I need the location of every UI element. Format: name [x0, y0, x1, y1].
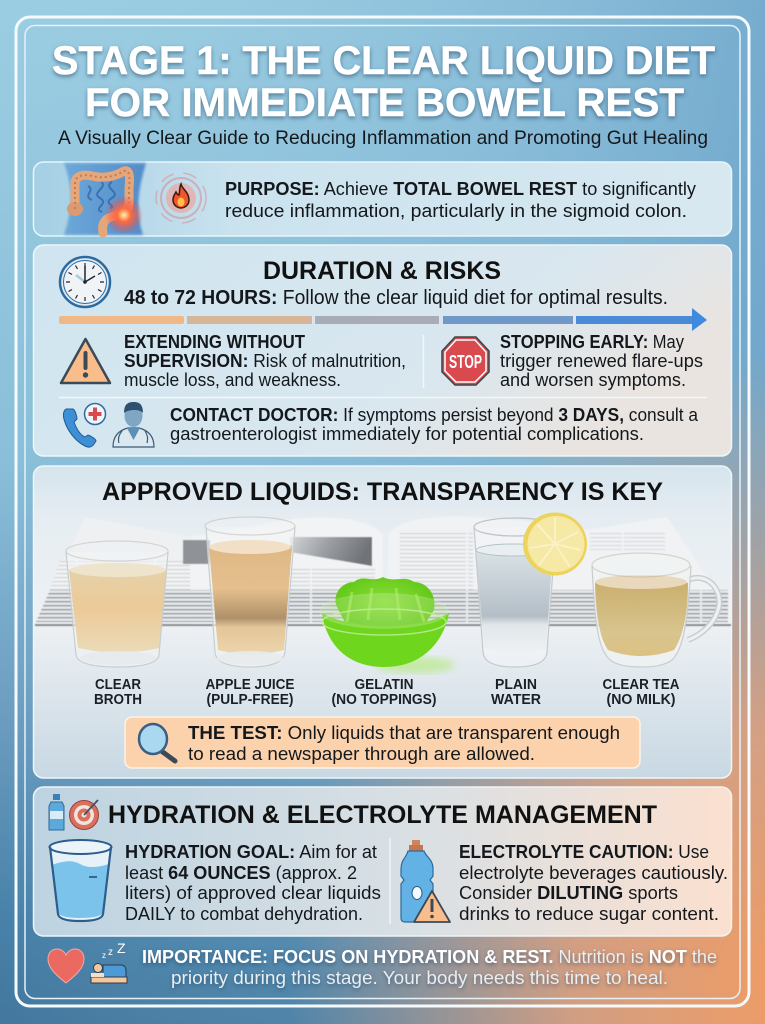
icon: heart: [48, 949, 84, 983]
bowl: green gelatin: [320, 577, 449, 667]
importance note: IMPORTANCE: FOCUS ON HYDRATION & REST. Nutrition is NOT the: [142, 947, 717, 967]
icon: glass of water: [50, 840, 112, 921]
title: FOR IMMEDIATE BOWEL REST: [85, 81, 684, 125]
lemon slice: [523, 512, 587, 576]
glass: clear broth: [66, 541, 168, 667]
hydration goal text: least 64 OUNCES (approx. 2: [125, 863, 357, 883]
panel: purpose: [34, 162, 732, 236]
soft reflected light on table: [375, 657, 455, 673]
test text: [188, 722, 620, 764]
label: gelatin: (NO TOPPINGS): [332, 692, 437, 708]
importance note: priority during this stage. Your body needs this time to heal.: [171, 968, 668, 988]
extending without supervision text: muscle loss, and weakness.: [124, 370, 341, 390]
label: gelatin: GELATIN: [354, 677, 414, 693]
contact doctor text: gastroenterologist immediately for potential complications.: [170, 424, 644, 444]
icon: sports bottle with warning: [401, 840, 450, 922]
title: STAGE 1: THE CLEAR LIQUID DIET: [52, 39, 715, 83]
panel: duration and risks: [34, 245, 732, 456]
icon: target: [70, 800, 98, 830]
icon: magnifying glass: [139, 724, 175, 761]
hydration goal text: liters) of approved clear liquids: [125, 883, 381, 903]
icon: doctor: [113, 402, 154, 447]
heading: duration and risks: DURATION & RISKS: [263, 257, 501, 285]
extending without supervision text: [124, 332, 406, 390]
electrolyte caution text: ELECTROLYTE CAUTION: Use: [459, 842, 709, 862]
extending without supervision text: EXTENDING WITHOUT: [124, 332, 305, 352]
electrolyte caution text: Consider DILUTING sports: [459, 883, 678, 903]
electrolyte caution text: [459, 842, 728, 924]
timeline arrow: [59, 308, 707, 331]
stopping early text: [500, 332, 703, 390]
icon: colon with inflammation: [64, 163, 146, 235]
test text: THE TEST: Only liquids that are transparent enough: [188, 722, 620, 743]
stopping early text: and worsen symptoms.: [500, 370, 686, 390]
importance note: [142, 947, 717, 988]
label: plain water: [491, 677, 542, 708]
panel: approved liquids: [34, 466, 732, 778]
contact doctor text: [170, 405, 699, 444]
icon: sleeping person: [91, 940, 127, 983]
label: apple juice: [206, 677, 295, 708]
electrolyte caution text: drinks to reduce sugar content.: [459, 904, 719, 924]
title: [52, 39, 715, 125]
newspaper backdrop photo: [35, 516, 731, 625]
hydration goal text: HYDRATION GOAL: Aim for at: [125, 842, 377, 862]
purpose text: PURPOSE: Achieve TOTAL BOWEL REST to significantly: [225, 179, 696, 199]
electrolyte caution text: electrolyte beverages cautiously.: [459, 863, 728, 883]
extending without supervision text: SUPERVISION: Risk of malnutrition,: [124, 351, 406, 371]
subtitle: A Visually Clear Guide to Reducing Inflammation and Promoting Gut Healing: [58, 127, 708, 149]
stopping early text: trigger renewed flare-ups: [500, 351, 703, 371]
panel: hydration and electrolytes: [34, 787, 732, 936]
icon: stop sign: [442, 337, 489, 385]
icon: sleeping person: z: [102, 951, 106, 960]
glass: apple juice: [205, 517, 295, 667]
hydration goal text: DAILY to combat dehydration.: [125, 904, 363, 924]
purpose text: [225, 179, 696, 221]
stopping early text: STOPPING EARLY: May: [500, 332, 684, 352]
label: apple juice: (PULP-FREE): [206, 692, 294, 708]
heading: approved liquids: APPROVED LIQUIDS: TRANSPARENCY IS KEY: [102, 478, 663, 506]
hydration goal text: [125, 842, 381, 924]
duration text: 48 to 72 HOURS: Follow the clear liquid diet for optimal results.: [124, 287, 668, 309]
purpose text: reduce inflammation, particularly in the sigmoid colon.: [225, 201, 687, 221]
mug: clear tea: [592, 553, 719, 667]
label: gelatin: [332, 677, 437, 708]
callout: the test: [125, 717, 640, 768]
label: clear broth: [94, 677, 142, 708]
label: clear tea: [602, 677, 680, 708]
contact doctor text: CONTACT DOCTOR: If symptoms persist beyond 3 DAYS, consult a: [170, 405, 699, 425]
icon: stop sign: STOP: [449, 352, 482, 372]
label: clear broth: CLEAR: [95, 677, 141, 693]
glass: plain water: [474, 518, 556, 667]
icon: warning triangle: [61, 339, 110, 383]
label: clear tea: CLEAR TEA: [602, 677, 680, 693]
label: plain water: PLAIN: [495, 677, 537, 693]
heading: hydration: HYDRATION & ELECTROLYTE MANAGEMENT: [108, 801, 657, 829]
test text: to read a newspaper through are allowed.: [188, 743, 535, 764]
icon: sleeping person: Z: [117, 940, 126, 956]
icon: phone and medical cross: [63, 404, 106, 447]
icon: small water bottle: [49, 794, 64, 830]
label: plain water: WATER: [491, 692, 542, 708]
icon: clock: [60, 257, 110, 307]
icon: flame with rings: [156, 173, 206, 223]
label: clear broth: BROTH: [94, 692, 142, 708]
label: apple juice: APPLE JUICE: [206, 677, 295, 693]
icon: sleeping person: z: [108, 947, 113, 958]
label: clear tea: (NO MILK): [606, 692, 676, 708]
